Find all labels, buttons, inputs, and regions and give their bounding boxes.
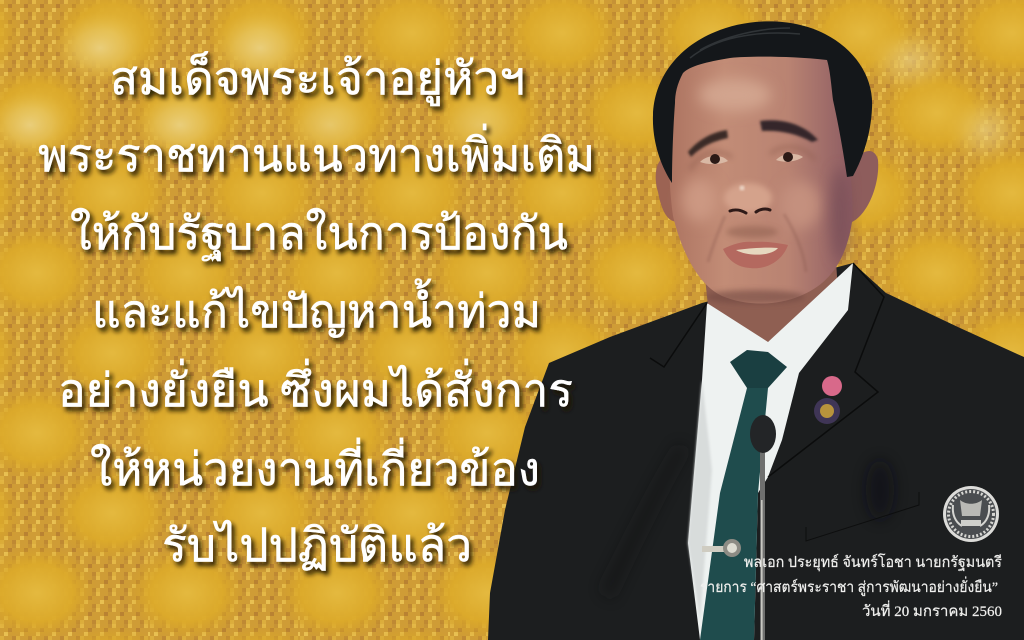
chest pocket [806,492,919,541]
suit shadow near pocket [866,460,894,520]
tie [700,388,768,640]
tie knot [730,350,787,388]
lapel pins [814,376,842,424]
hair sheen [690,28,800,58]
quote line 1: สมเด็จพระเจ้าอยู่หัวฯ [110,51,525,106]
neck [704,262,838,350]
icon: government seal [943,486,999,542]
nose [724,183,772,213]
microphone [750,415,776,640]
tie clip [702,539,741,557]
quote line 7: รับไปปฏิบัติแล้ว [162,519,472,571]
programme name: รายการ “ศาสตร์พระราชา สู่การพัฒนาอย่างยั่งยืน” [700,576,998,596]
face [669,48,852,304]
mouth [723,242,788,268]
ears [656,158,682,222]
shirt shadow [688,380,712,620]
white shirt [688,263,853,640]
quote line 5: อย่างยั่งยืน ซึ่งผมได้สั่งการ [58,358,573,416]
quote line 6: ให้หน่วยงานที่เกี่ยวข้อง [90,437,540,495]
hair [653,21,872,183]
portrait: prime minister at the microphone [488,21,1024,640]
facial shading and highlights [682,79,850,304]
quote line 2: พระราชทานแนวทางเพิ่มเติม [38,123,595,181]
quote line 4: และแก้ไขปัญหาน้ำท่วม [92,278,541,337]
suit jacket [488,263,1024,640]
headline quote in Thai [38,51,595,571]
speaker name: พลเอก ประยุทธ์ จันทร์โอชา นายกรัฐมนตรี [744,553,1002,572]
suit shading [600,443,688,600]
date: วันที่ 20 มกราคม 2560 [862,600,1002,620]
eyes [700,152,803,164]
lapel edge lines [650,263,884,477]
quote line 3: ให้กับรัฐบาลในการป้องกัน [70,207,568,261]
attribution caption [700,553,1002,620]
eyebrows [688,130,728,157]
